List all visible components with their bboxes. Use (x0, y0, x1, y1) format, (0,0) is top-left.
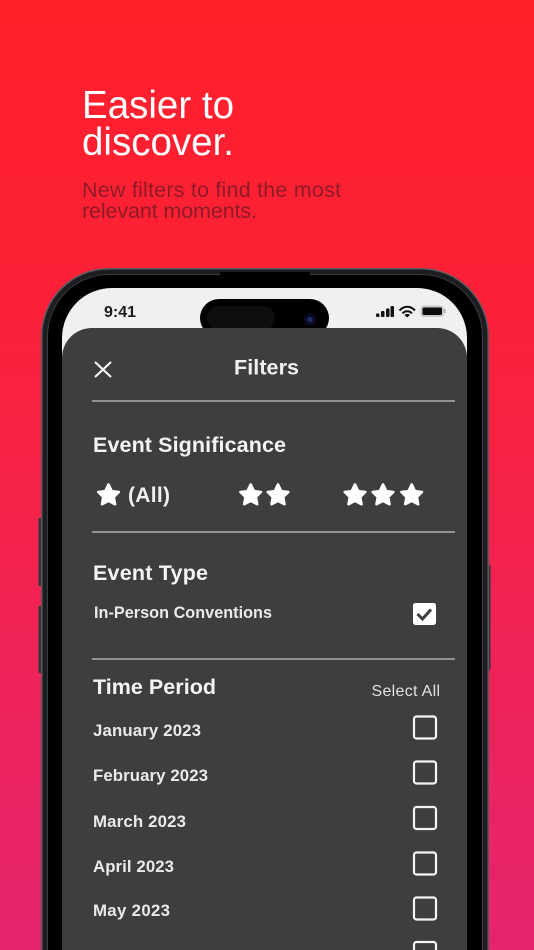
month: May 2023: May 2023 (93, 901, 170, 920)
headline: discover. (82, 121, 234, 164)
phone frame (41, 268, 489, 950)
section heading: time period: Time Period (93, 675, 216, 699)
close icon (95, 362, 111, 377)
partial checkbox (414, 942, 436, 950)
battery icon (420, 306, 446, 317)
filter sheet (62, 328, 467, 950)
headline: Easier to (82, 84, 234, 127)
camera lens (304, 314, 316, 326)
subheading: New filters to find the most (82, 178, 341, 202)
signal icon (376, 306, 394, 317)
month: May 2023 (93, 898, 436, 920)
option label: In-Person Conventions (94, 604, 272, 622)
rating filter: all: (All) (128, 484, 170, 507)
month: February 2023: February 2023 (93, 766, 208, 785)
month: February 2023 (93, 762, 436, 785)
wifi icon (400, 307, 415, 318)
phone (38, 268, 490, 950)
month: March 2023: March 2023 (93, 812, 186, 831)
dynamic island (200, 299, 329, 337)
month: January 2023: January 2023 (93, 721, 201, 740)
month: March 2023 (93, 807, 436, 831)
month: January 2023 (93, 716, 436, 740)
rating filter: all (98, 484, 170, 507)
rating filter: three stars (345, 484, 422, 504)
section heading: event significance: Event Significance (93, 433, 286, 457)
section heading: event type: Event Type (93, 561, 208, 585)
status bar screen (62, 288, 467, 950)
select all: Select All (372, 683, 440, 700)
status time: 9:41 (104, 304, 136, 321)
month: April 2023 (93, 852, 436, 876)
month: April 2023: April 2023 (93, 857, 174, 876)
subheading: relevant moments. (82, 199, 257, 223)
rating filter: two stars (240, 484, 288, 504)
sheet title: Filters (234, 356, 299, 380)
checked checkbox (413, 603, 436, 625)
side buttons (38, 518, 490, 673)
